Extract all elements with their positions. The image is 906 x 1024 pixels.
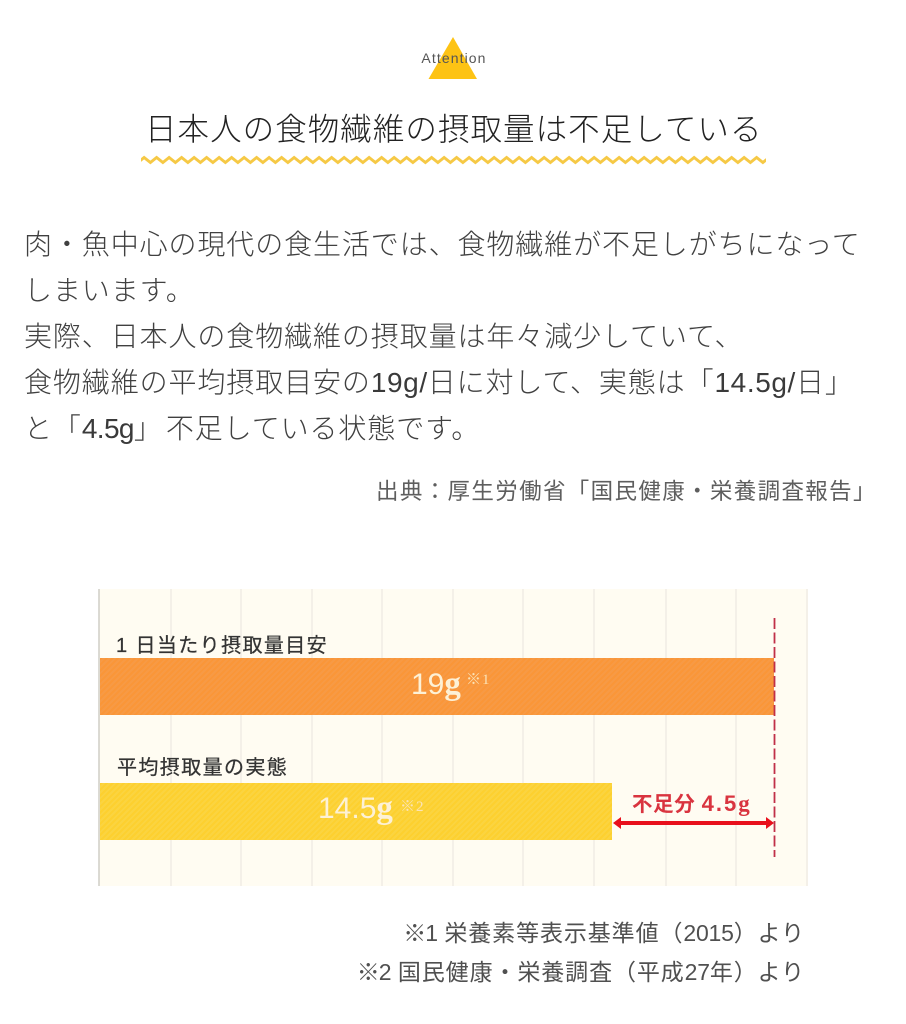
source citation: 出典：厚生労働省「国民健康・栄養調査報告」 [376,479,877,504]
icon: attention triangle with label: Attention [421,50,487,66]
bar: actual 14.5g [100,783,612,840]
arrow: shortfall span [613,817,774,829]
text block: explanation: 食物繊維の平均摂取目安の19g/日に対して、実態は「14.5g/日」 [24,367,854,398]
text block: explanation: 肉・魚中心の現代の食生活では、食物繊維が不足しがちになって [24,229,861,260]
bar value: 19g [411,666,491,702]
title: 日本人の食物繊維の摂取量は不足している [145,111,763,147]
shortfall label: 不足分 4.5g [632,791,750,816]
text block: explanation [24,229,861,444]
icon: attention triangle with label [421,37,487,79]
wavy underline [141,156,766,164]
target dashed line [774,618,776,857]
text block: explanation: 実際、日本人の食物繊維の摂取量は年々減少していて、 [24,321,743,352]
label: actual intake: 平均摂取量の実態 [117,757,288,779]
bar value: 14.5g: ※2 [400,799,425,815]
bar value: 19g: ※1 [466,672,491,688]
chart background and grid [98,589,808,886]
footnotes: ※2 国民健康・栄養調査（平成27年）より [357,959,805,985]
chart: fiber intake comparison [98,589,808,886]
label: recommended intake: 1 日当たり摂取量目安 [116,635,328,657]
text block: explanation: しまいます。 [24,275,195,306]
footnotes: ※1 栄養素等表示基準値（2015）より [403,920,805,946]
text block: explanation: と「4.5g」不足している状態です。 [24,413,480,444]
bar value: 14.5g: 14.5g [318,790,393,826]
footnotes [357,920,805,985]
bar value: 19g: 19g [411,666,461,702]
bar: recommended 19g [100,658,774,715]
